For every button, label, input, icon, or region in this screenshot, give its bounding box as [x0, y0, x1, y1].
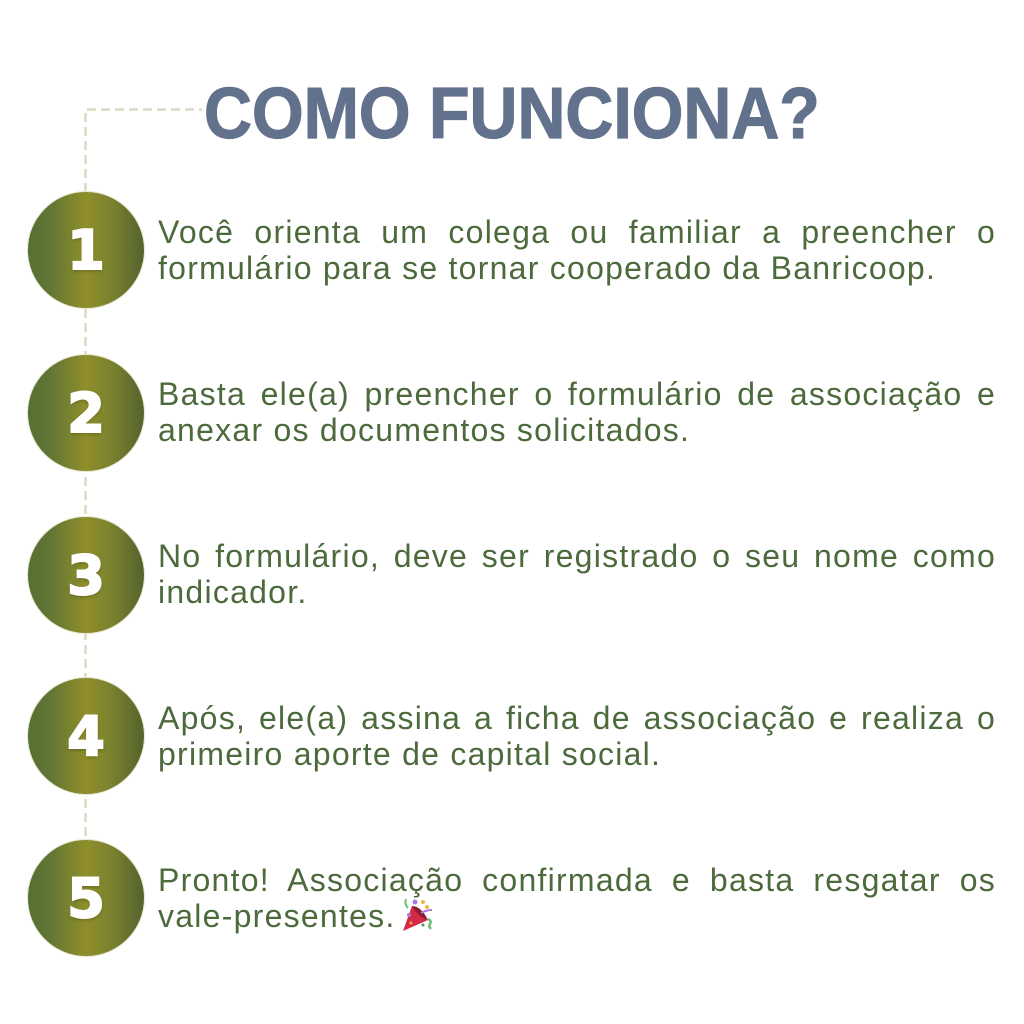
step 4 text: primeiro aporte de capital social.: [158, 736, 661, 772]
step 4 text: [158, 700, 996, 772]
step 2 text: anexar os documentos solicitados.: [158, 412, 690, 448]
step 4 number badge: [28, 678, 144, 794]
step 5 text: vale-presentes.: [158, 898, 396, 934]
step 4 number badge: 4: [67, 705, 105, 768]
step 3 text: indicador.: [158, 574, 307, 610]
step 2 text: Basta ele(a) preencher o formulário de associação e: [158, 376, 996, 412]
step 1 number badge: 1: [67, 219, 105, 282]
step 4 text: Após, ele(a) assina a ficha de associação e realiza o: [158, 700, 996, 736]
step 3 text: [158, 538, 996, 610]
step 3 number badge: [28, 517, 144, 633]
step 2 number badge: [28, 355, 144, 471]
step 1 number badge: [28, 192, 144, 308]
step 3 text: No formulário, deve ser registrado o seu nome como: [158, 538, 996, 574]
icon: party popper: [403, 898, 432, 931]
step 5 number badge: 5: [67, 867, 105, 930]
step 1 text: Você orienta um colega ou familiar a preencher o: [158, 214, 996, 250]
step 3 number badge: 3: [67, 544, 105, 607]
title: COMO FUNCIONA?: [204, 74, 820, 154]
step 1 text: formulário para se tornar cooperado da Banricoop.: [158, 250, 936, 286]
step 2 text: [158, 376, 996, 448]
step 1 text: [158, 214, 996, 286]
step 5 text: Pronto! Associação confirmada e basta resgatar os: [158, 862, 996, 898]
step 5 text: [158, 862, 996, 934]
step 2 number badge: 2: [67, 382, 105, 445]
step 5 number badge: [28, 840, 144, 956]
